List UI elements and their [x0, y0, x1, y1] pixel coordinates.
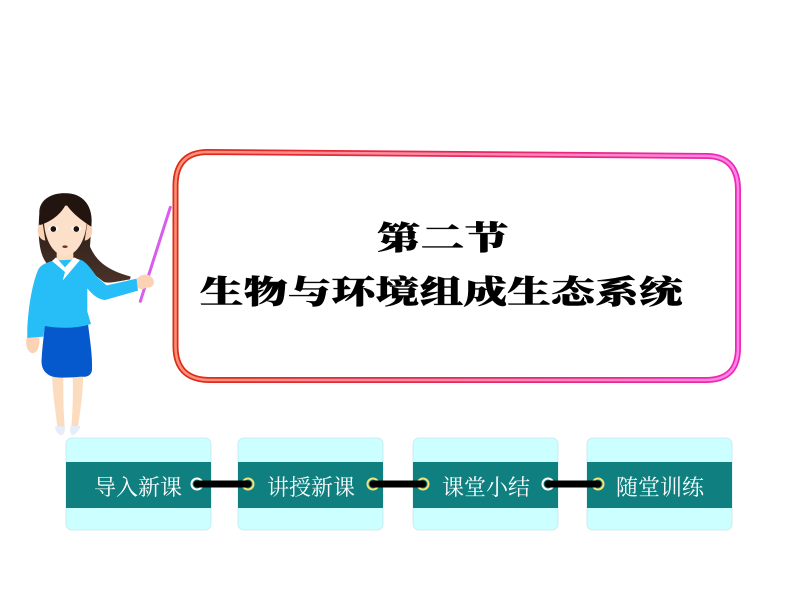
mouth — [62, 245, 68, 248]
illustration: teacher with pointer — [26, 193, 170, 435]
connector: third to fourth button — [542, 478, 604, 490]
shoes — [55, 426, 81, 435]
nav button: 导入新课 — [66, 438, 211, 530]
title: section number: 第二节 — [377, 220, 508, 257]
nav button: 随堂训练: 随堂训练 — [616, 475, 705, 500]
face — [44, 206, 87, 256]
fringe — [40, 193, 92, 227]
skirt — [42, 324, 92, 378]
connector: first to second button — [192, 478, 254, 490]
blouse — [27, 259, 138, 338]
panel: rounded title frame — [176, 152, 738, 380]
nav button: 讲授新课 — [238, 438, 383, 530]
ears — [38, 223, 92, 241]
nav button: 课堂小结: 课堂小结 — [442, 475, 530, 500]
nav button: 课堂小结 — [413, 438, 558, 530]
right hand — [137, 275, 154, 289]
legs — [52, 375, 83, 427]
hair back — [39, 193, 131, 283]
connector: second to third button — [368, 478, 428, 490]
nav button: 随堂训练 — [587, 438, 732, 530]
title: section name: 生物与环境组成生态系统 — [200, 274, 686, 311]
eyes — [48, 226, 58, 231]
pointer — [140, 207, 170, 301]
collar — [52, 257, 80, 281]
nav button: 讲授新课: 讲授新课 — [267, 475, 355, 500]
nav button: 导入新课: 导入新课 — [94, 475, 182, 500]
neck — [57, 250, 73, 268]
left hand — [26, 337, 39, 353]
